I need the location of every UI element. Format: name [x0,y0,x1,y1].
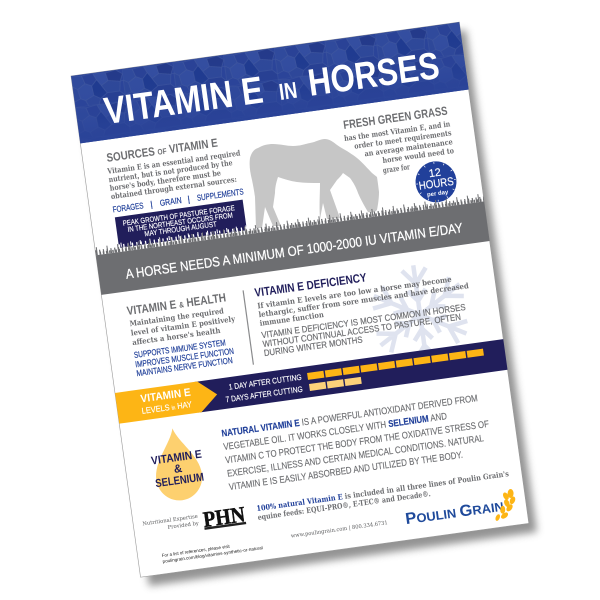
heading: deficiency: VITAMIN E DEFICIENCY [254,270,367,300]
source list: GRAIN [159,195,182,208]
natural vitamin E paragraph: EXERCISE, ILLNESS AND CERTAIN MEDICAL CONDITIONS. NATURAL [226,433,485,480]
icon: vitamin E and selenium drop: & [173,463,183,476]
panel: vitamin E levels in hay [115,339,508,424]
icon: vitamin E and selenium drop: VITAMIN E [150,449,203,468]
logo: Poulin Grain: POULIN GRAIN [404,498,505,528]
natural vitamin E paragraph: VITAMIN C TO PROTECT THE BODY FROM THE OXIDATIVE STRESS OF [225,419,490,466]
icon: vitamin E and selenium drop [147,425,208,504]
header banner with title [71,22,469,143]
header banner with title: HORSES [305,45,442,105]
badge: 12 hours per day: 12 [428,167,442,180]
icon: grain [491,488,519,522]
health body text: level of vitamin E positively [130,314,236,338]
grass body text: horse would need to [382,146,455,165]
badge: 12 hours per day [413,159,459,205]
nutritional expertise credit: Provided by [167,521,199,531]
natural vitamin E paragraph: VEGETABLE OIL. IT WORKS CLOSELY WITH SELENIUM AND [223,411,448,453]
references footnote: poulingrain.com/blog/vitamins-synthetic-or-natural [162,545,263,564]
grass body text: order to meet requirements [354,128,452,151]
bar chart: 1 day after cutting [307,349,484,380]
sources body text: Vitamin E is an essential and required [106,148,241,176]
health benefits list: IMPROVES MUSCLE FUNCTION [135,346,234,369]
arrow label: levels in hay: VITAMIN E [140,387,191,405]
header banner with title: VITAMIN E [101,69,266,133]
health body text: Maintaining the required [129,306,225,328]
natural vitamin E paragraph: VITAMIN E IS EASILY ABSORBED AND UTILIZED BY THE BODY. [228,450,464,493]
deficiency body text: immune function [259,310,325,328]
heading: vitamin E and health: VITAMIN E & HEALTH [126,290,227,318]
sources body text: obtained through external sources: [110,175,238,201]
icon: vitamin E and selenium drop: SELENIUM [155,472,205,490]
panel: sources of vitamin E [104,133,252,249]
natural vitamin E product note: equine feeds: EQUI-PRO®, E-TEC® and Decade®. [257,489,432,522]
horse silhouette [250,139,379,228]
health benefits list [133,336,236,378]
deficiency note: DURING WINTER MONTHS [263,334,363,358]
natural vitamin E paragraph [221,392,493,493]
source list: | [187,194,190,204]
health body text [129,305,237,347]
health benefits list: MAINTAINS NERVE FUNCTION [136,355,233,378]
source list: FORAGES [112,200,144,214]
sources body text [106,148,245,201]
health body text: affects a horse's health [132,326,221,347]
panel: fresh green grass [341,103,461,214]
grass body text [344,119,456,180]
deficiency note [261,302,469,358]
grass body text: has the most Vitamin E, and in [344,119,451,143]
sources body text: horse's body, therefore must be [109,168,221,193]
deficiency body text: If vitamin E levels are too low a horse may become [257,275,452,311]
badge: 12 hours per day: per day [427,190,449,199]
panel: vitamin E deficiency [254,257,475,358]
callout: peak growth: PEAK GROWTH OF PASTURE FORAGE [122,203,235,228]
panel: vitamin E and health [126,289,242,378]
arrow label: levels in hay: LEVELS in HAY [141,399,193,416]
natural vitamin E product note: 100% natural Vitamin E is included in all three lines of Poulin Grain's [256,469,509,513]
grass highlight blades [119,227,248,253]
source list [112,186,244,214]
source list: | [150,199,153,209]
callout: peak growth: MAY THROUGH AUGUST [144,219,218,238]
callout: peak growth: IN THE NORTHEAST OCCURS FROM [127,210,233,234]
row labels: 1 DAY AFTER CUTTING [228,373,302,392]
arrow label: levels in hay [115,379,219,424]
page drop shadow [78,30,537,586]
logo: PHN: PHN [201,501,247,532]
heading: sources: SOURCES OF VITAMIN E [106,136,218,165]
natural vitamin E paragraph: NATURAL VITAMIN E IS A POWERFUL ANTIOXIDANT DERIVED FROM [221,393,478,440]
logo: Poulin Grain [403,488,519,534]
grass body text: graze for [382,162,411,175]
callout: peak growth [115,200,247,249]
minimum dose band: A HORSE NEEDS A MINIMUM OF 1000-2000 IU VITAMIN E/DAY [125,220,464,282]
badge: 12 hours per day: HOURS [418,176,455,193]
nutritional expertise credit: Nutritional Expertise [142,514,198,527]
icon: snowflake [364,258,476,371]
deficiency body text: lethargic, suffer from sore muscles and have decreased [258,281,470,319]
deficiency note: VITAMIN E DEFICIENCY IS MOST COMMON IN HORSES [261,302,466,340]
nutritional expertise credit [142,514,199,534]
header banner with title: IN [277,77,299,105]
sources body text: nutrient, but is not produced by the [108,158,233,184]
row labels [223,373,304,404]
row labels: 7 DAYS AFTER CUTTING [225,385,303,404]
bar chart: 7 days after cutting [309,377,362,391]
references footnote: For a list of references, please visit [161,544,231,558]
grass body text: an average maintenance [364,137,453,158]
health benefits list: SUPPORTS IMMUNE SYSTEM [133,337,226,360]
deficiency note: WITHOUT CONTINUAL ACCESS TO PASTURE, OFTEN [262,312,461,349]
deficiency body text [257,272,471,328]
minimum dose band [95,197,490,295]
source list: SUPPLEMENTS [196,186,244,203]
website and phone: www.poulingrain.com | 800.334.6731 [291,520,388,540]
flyer page [71,22,529,577]
heading: fresh green grass: FRESH GREEN GRASS [342,104,448,132]
